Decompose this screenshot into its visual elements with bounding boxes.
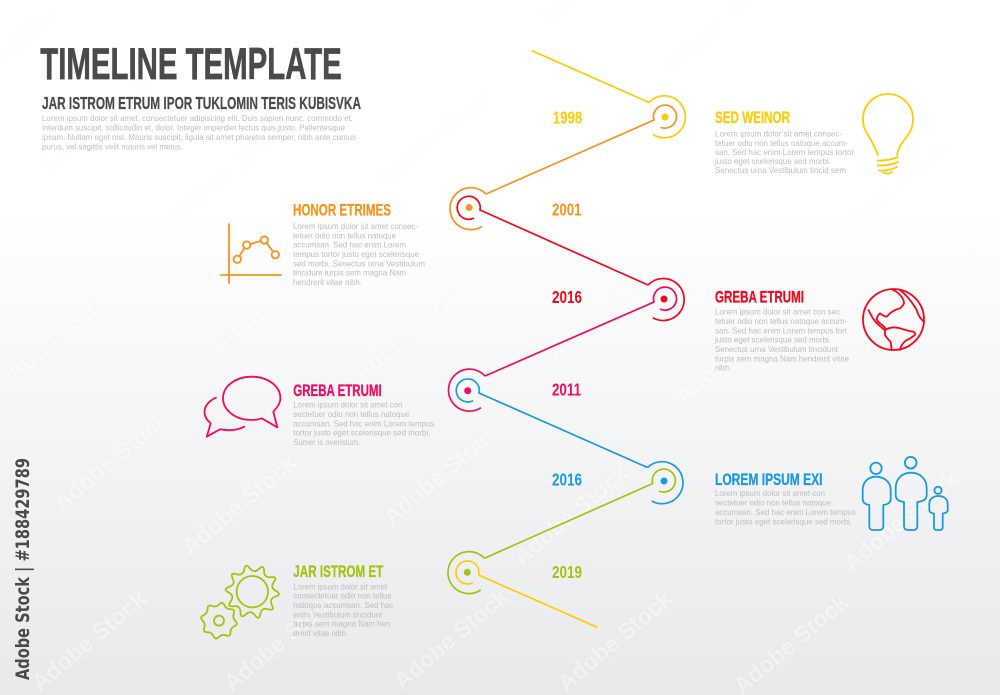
- panel: greba etrumi right: nibh.: [715, 363, 731, 373]
- year labels: [552, 107, 582, 582]
- panel: jar istrom et: natoque accumsan. Sed hac: [293, 600, 394, 610]
- panel: sed weinor: SED WEINOR: [715, 109, 790, 127]
- panel: greba etrumi right: justo eget scelerisque sed morbi.: [714, 335, 831, 345]
- panel: greba etrumi left: accumsan. Sed hac enim Lorem tempus: [293, 418, 434, 428]
- panel: sed weinor: tetuer odio non tellus natoque accum-: [715, 138, 848, 148]
- intro text: purus, vel sagittis velit mauris vel metus.: [42, 142, 183, 152]
- panel: jar istrom et: Lorem ipsum dolor sit amet: [293, 581, 388, 591]
- watermark pattern: Adobe Stock: [49, 405, 173, 516]
- watermark pattern: Adobe Stock: [219, 585, 343, 695]
- panel: greba etrumi right: san. Sed hac enim Lorem tempus tort: [715, 325, 848, 335]
- panel: greba etrumi left: Lorem ipsum dolor sit amet con: [293, 399, 403, 409]
- panel: lorem ipsum exi: Lorem ipsum dolor sit amet con: [715, 488, 825, 498]
- year labels: 2001: [552, 200, 582, 220]
- panel: jar istrom et: enim Vestibulum tincidunt: [293, 609, 383, 619]
- year labels: 2016: [552, 470, 582, 490]
- watermark pattern: Adobe Stock: [212, 243, 336, 354]
- panel: greba etrumi right: GREBA ETRUMI: [715, 288, 804, 306]
- watermark pattern: Adobe Stock: [27, 585, 151, 695]
- icon: line chart: [221, 224, 281, 283]
- watermark pattern: Adobe Stock: [167, 115, 291, 226]
- panel: lorem ipsum exi: LOREM IPSUM EXI: [715, 471, 822, 489]
- intro text: ipsum. Nullam eget nisl. Mauris suscipit, ligula sit amet pharetra semper, nibh ante cursus: [42, 132, 356, 142]
- panel: lorem ipsum exi: [715, 471, 856, 526]
- panel: sed weinor: Senectus urna Vestibulum tincid sem: [715, 165, 846, 175]
- icon: globe: [863, 289, 924, 350]
- panel: sed weinor: justo eget scelerisque sed morbi.: [714, 156, 831, 166]
- panel: sed weinor: san. Sed hac enim Lorem tempus tortor: [715, 147, 854, 157]
- panel: greba etrumi left: GREBA ETRUMI: [293, 382, 382, 400]
- timeline zigzag: [448, 50, 685, 627]
- panel: honor etrimes: sed morbi. Senectus urna Vestibulum: [293, 258, 425, 268]
- panel: lorem ipsum exi: accumsan. Sed hac enim Lorem tempus: [715, 507, 856, 517]
- panel: honor etrimes: Lorem ipsum dolor sit amet consec-: [293, 221, 418, 231]
- intro text: Lorem ipsum dolor sit amet, consectetuer adipiscing elit. Duis sapien nunc, commodo et,: [42, 113, 353, 123]
- watermark pattern: Adobe Stock: [379, 419, 503, 530]
- watermark pattern: Adobe Stock: [829, 135, 953, 246]
- panel: jar istrom et: [293, 563, 394, 638]
- panel: greba etrumi right: [714, 288, 849, 373]
- panel: honor etrimes: tincidunt turpis sem magna Nam: [293, 268, 406, 278]
- panel: greba etrumi left: tortor justo eget scelerisque sed morbi.: [293, 428, 430, 438]
- watermark pattern: Adobe Stock: [389, 583, 513, 694]
- watermark pattern: Adobe Stock: [543, 255, 667, 366]
- panel: lorem ipsum exi: tortor justo eget scelerisque sed morbi.: [715, 516, 852, 526]
- watermark pattern: Adobe Stock: [553, 585, 677, 695]
- vertical stock credit: Adobe Stock | #188429789: [12, 458, 34, 680]
- year labels: 1998: [553, 107, 582, 127]
- node 2019: [448, 552, 597, 627]
- watermark pattern: Adobe Stock: [372, 81, 496, 192]
- panel: greba etrumi right: tetuer odio non tellus natoque accum-: [715, 316, 847, 326]
- panel: jar istrom et: drerit vitae nibh.: [293, 628, 348, 638]
- panel: greba etrumi left: Sumer is overistum.: [293, 437, 360, 447]
- panel: honor etrimes: accumsan. Sed hac enim Lorem: [293, 240, 406, 250]
- node 1998: [486, 50, 685, 194]
- panel: sed weinor: [714, 109, 854, 175]
- watermark pattern: Adobe Stock: [862, 243, 986, 354]
- panel: honor etrimes: hendrerit vitae nibh.: [293, 277, 362, 287]
- panel: lorem ipsum exi: sectetuer odio non tellus natoque: [715, 498, 831, 508]
- watermark pattern: Adobe Stock: [349, 275, 473, 386]
- watermark pattern: Adobe Stock: [177, 449, 301, 560]
- intro text: [42, 113, 356, 152]
- panel: sed weinor: Lorem ipsum dolor sit amet consec-: [715, 129, 842, 139]
- icon: speech bubbles: [204, 377, 280, 437]
- year labels: 2019: [552, 562, 582, 582]
- year labels: 2016: [552, 287, 582, 307]
- watermark pattern: Adobe Stock: [839, 465, 963, 576]
- icon: gears: [198, 564, 281, 642]
- panel: greba etrumi right: Lorem ipsum dolor sit amet con sec: [715, 307, 841, 317]
- panel: honor etrimes: tetuer odio non tellus natoque: [293, 230, 396, 240]
- node 2001: [450, 188, 648, 285]
- subtitle: JAR ISTROM ETRUM IPOR TUKLOMIN TERIS KUBISVKA: [42, 93, 361, 113]
- watermark pattern: Adobe Stock: [671, 298, 795, 409]
- watermark pattern: Adobe Stock: [509, 459, 633, 570]
- panel: greba etrumi left: [293, 382, 434, 447]
- icon: light bulb: [863, 94, 913, 174]
- panel: honor etrimes: tempus tortor justo eget scelerisque: [293, 249, 419, 259]
- panel: greba etrumi right: turpis sem magna Nam hendrerit vitae: [715, 353, 849, 363]
- node 2016 blue: [484, 462, 683, 558]
- panel: greba etrumi right: Senectus urna Vestibulum tincidunt: [715, 344, 839, 354]
- watermark pattern: Adobe Stock: [34, 71, 158, 182]
- icon: family: [863, 457, 948, 530]
- watermark pattern: Adobe Stock: [2, 275, 126, 386]
- node 2016 red: [485, 279, 684, 376]
- panel: jar istrom et: turpis sem magna Nam hen: [293, 619, 391, 629]
- year labels: 2011: [552, 380, 581, 400]
- panel: jar istrom et: JAR ISTROM ET: [293, 563, 383, 581]
- intro text: interdum suscipit, sollicitudin et, dolor. Integer imperdiet lectus quis justo. Pellentesque: [42, 122, 345, 132]
- panel: honor etrimes: [293, 201, 425, 287]
- panel: jar istrom et: consectetuer odio non tellus: [293, 591, 391, 601]
- title: TIMELINE TEMPLATE: [40, 40, 342, 89]
- node 2011: [448, 369, 648, 468]
- panel: greba etrumi left: sectetuer odio non tellus natoque: [293, 409, 410, 419]
- panel: honor etrimes: HONOR ETRIMES: [293, 201, 391, 219]
